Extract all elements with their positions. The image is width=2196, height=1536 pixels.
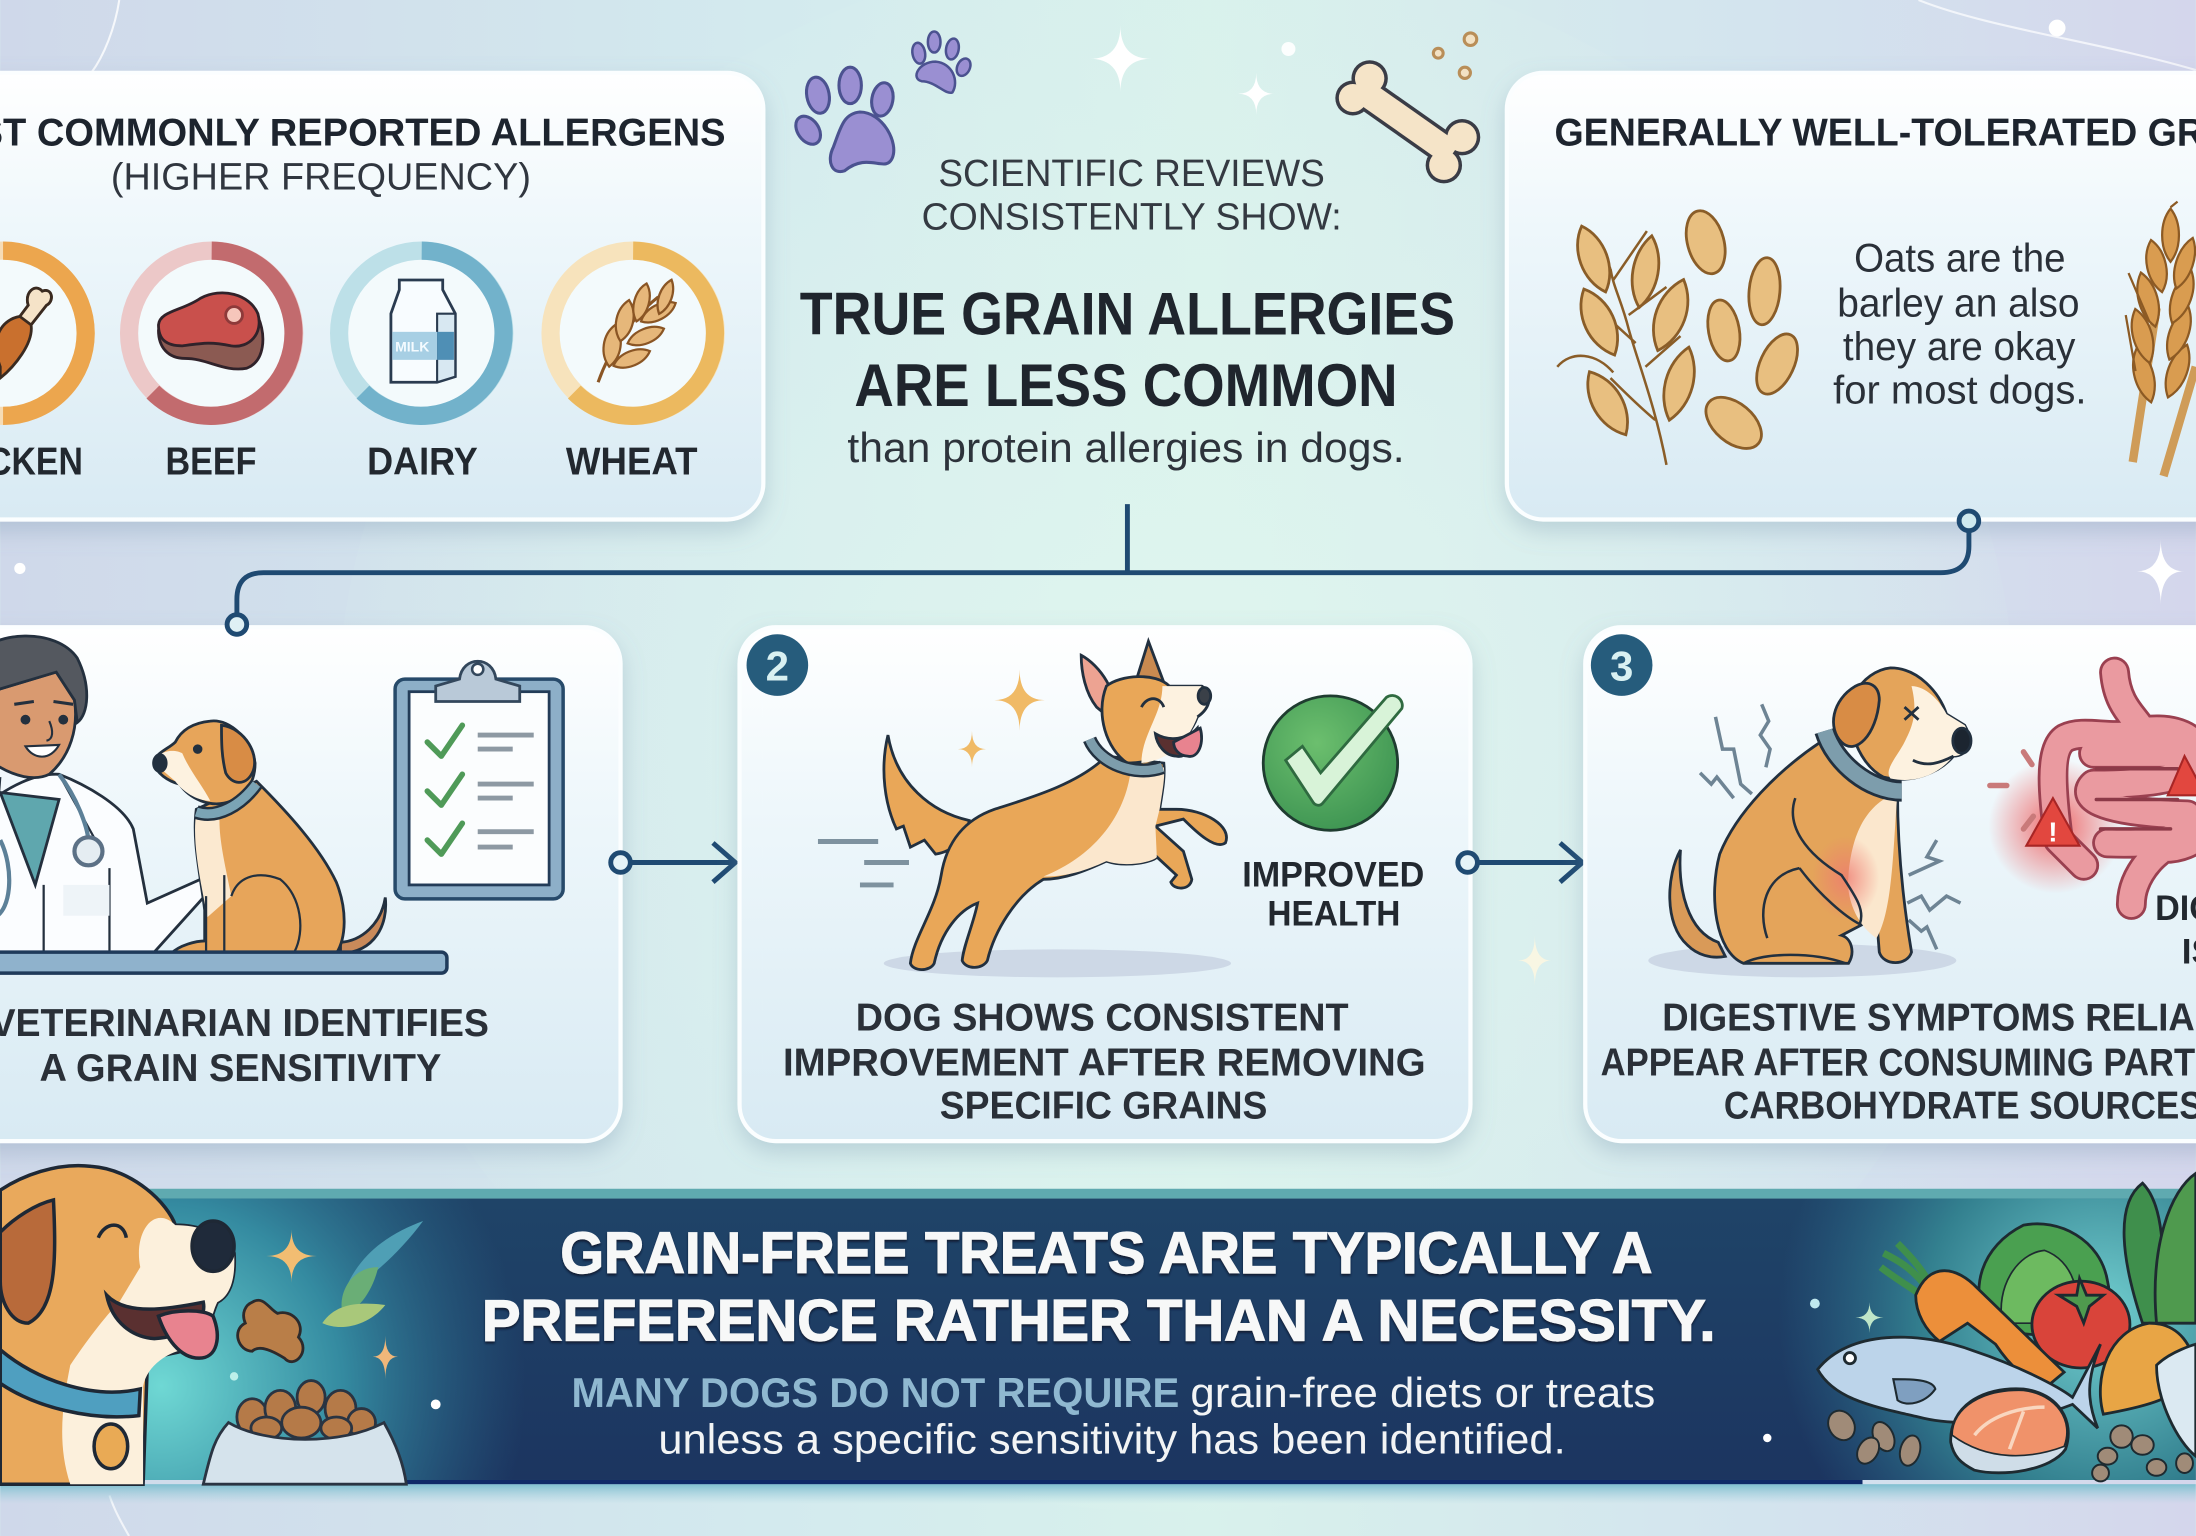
panel: step 3 digestive symptoms [1585, 627, 2196, 1141]
label: digestive issues [2155, 889, 2196, 971]
icon: discomfort zigzags [1700, 704, 1961, 949]
icon: wheat ring [551, 251, 716, 416]
caption: step 1 [0, 1002, 489, 1090]
badge: number 2 [747, 634, 808, 696]
icon: treat sparkles and leaf [230, 1221, 441, 1409]
icon: beef ring [129, 251, 294, 416]
illustration: seated dog [154, 721, 386, 954]
subline: protein allergies: than protein allergies in dogs. [847, 424, 1405, 471]
headline line 1: TRUE GRAIN ALLERGIES [800, 281, 1455, 348]
icon: dairy ring [339, 251, 504, 416]
text block: banner subline: grain-free diets or treats [1190, 1369, 1655, 1416]
text block: oats and barley: for most dogs. [1833, 368, 2087, 412]
text block: oats and barley: barley an also [1837, 281, 2080, 325]
icon: dairy ring: MILK [395, 338, 429, 354]
panel: generally well-tolerated grains [1507, 73, 2196, 519]
icon: large paw [791, 67, 896, 172]
label: dairy: DAIRY [367, 441, 478, 484]
caption: step 2 [783, 997, 1426, 1128]
icon: bone treat [238, 1300, 303, 1362]
caption: step 2: SPECIFIC GRAINS [940, 1085, 1267, 1128]
label: improved health: IMPROVED [1242, 855, 1424, 894]
headline: banner: PREFERENCE RATHER THAN A NECESSITY. [482, 1289, 1715, 1354]
subheading: higher frequency: (HIGHER FREQUENCY) [111, 157, 531, 199]
caption: step 2: DOG SHOWS CONSISTENT [856, 997, 1349, 1040]
banner: grain-free treats [0, 1166, 2196, 1504]
icon: green check [1263, 695, 1402, 830]
text block: oats and barley: Oats are the [1854, 237, 2066, 281]
icon: food bowl [203, 1381, 406, 1484]
text block: banner subline [572, 1369, 1655, 1462]
icon: barley stalks [2126, 202, 2196, 476]
icon: sparkles [958, 669, 1045, 767]
label: beef: BEEF [165, 441, 256, 484]
panel: most commonly reported allergens [0, 73, 763, 519]
illustration: uncomfortable dog [1648, 668, 1971, 977]
text block: oats and barley: they are okay [1843, 325, 2075, 369]
text block: oats and barley [1833, 237, 2087, 412]
caption: step 1: A GRAIN SENSITIVITY [39, 1047, 442, 1090]
icon: inflamed intestines: ! [2048, 817, 2058, 848]
icon: bone [1335, 33, 1480, 183]
panel: step 1 veterinarian [0, 627, 621, 1141]
illustration: veterinarian [0, 636, 205, 952]
headline line 2: ARE LESS COMMON [854, 352, 1398, 419]
illustration: jumping dog [884, 641, 1231, 977]
caption: step 1: VETERINARIAN IDENTIFIES [0, 1002, 489, 1045]
label: wheat: WHEAT [566, 441, 698, 484]
illustration: exam table [0, 952, 447, 973]
headline: banner [482, 1221, 1715, 1354]
icon: chicken ring [0, 251, 86, 416]
arrow: step 2 to step 3 [1458, 843, 1582, 882]
arrow: step 1 to step 2 [611, 843, 735, 882]
caption: step 2: IMPROVEMENT AFTER REMOVING [783, 1041, 1426, 1084]
icon: inflamed intestines [1989, 672, 2196, 905]
text block: banner subline: unless a specific sensitivity has been identified. [658, 1415, 1566, 1462]
icon: small paw [911, 32, 973, 93]
badge: number 2: 2 [766, 642, 789, 689]
icon: motion lines [818, 842, 909, 885]
icon: clipboard checklist [395, 661, 563, 899]
label: improved health [1242, 855, 1424, 934]
connector: branching line [227, 504, 1979, 634]
illustration: fresh foods [1763, 1173, 2196, 1481]
illustration: happy dog [0, 1166, 234, 1484]
panel: step 2 improvement [740, 627, 1470, 1141]
caption: step 3 [1601, 997, 2196, 1128]
intro: scientific reviews: SCIENTIFIC REVIEWS [938, 153, 1325, 195]
text block: central message [800, 153, 1455, 471]
label: improved health: HEALTH [1267, 895, 1400, 934]
text block: banner subline: MANY DOGS DO NOT REQUIRE [572, 1369, 1179, 1416]
icon: oat branch and grains [1557, 206, 1806, 465]
headline: banner: GRAIN-FREE TREATS ARE TYPICALLY A [560, 1221, 1652, 1286]
badge: number 3: 3 [1610, 642, 1633, 689]
intro: consistently show: CONSISTENTLY SHOW: [922, 197, 1342, 239]
badge: number 3 [1591, 634, 1652, 696]
